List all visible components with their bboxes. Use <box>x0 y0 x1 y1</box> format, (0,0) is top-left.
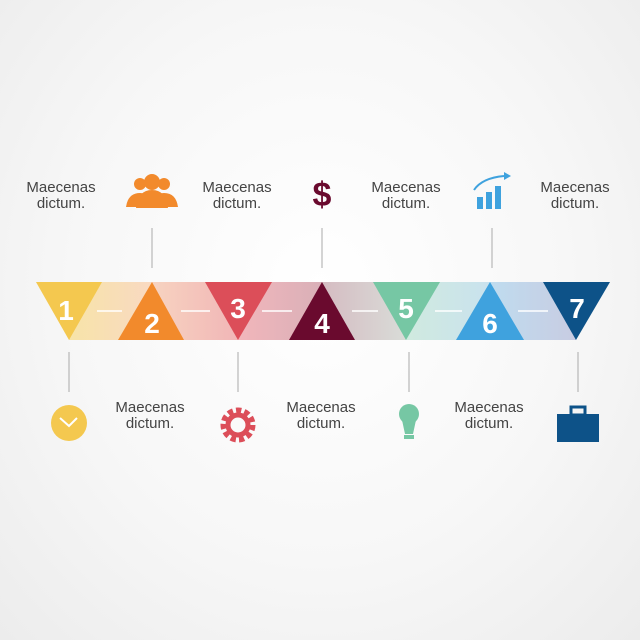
icon: dollar: $ <box>313 176 332 214</box>
text labels <box>26 179 610 432</box>
icon: growth chart <box>474 172 511 209</box>
step 7 triangle <box>543 282 610 340</box>
text labels: Maecenas <box>286 399 356 416</box>
step 1 triangle: 1 <box>58 295 74 326</box>
step 3 triangle: 3 <box>230 293 246 324</box>
text labels: Maecenas <box>540 179 610 196</box>
text labels: Maecenas <box>371 179 441 196</box>
icon: gear <box>224 411 252 439</box>
text labels: dictum. <box>213 195 261 212</box>
step 2 triangle <box>118 282 184 340</box>
step 5 triangle: 5 <box>398 293 414 324</box>
text labels: Maecenas <box>115 399 185 416</box>
text labels: dictum. <box>551 195 599 212</box>
text labels: dictum. <box>126 415 174 432</box>
text labels: dictum. <box>382 195 430 212</box>
text labels: Maecenas <box>454 399 524 416</box>
step 5 triangle <box>373 282 440 340</box>
icon: bulb <box>399 404 419 439</box>
icon: briefcase <box>557 407 599 442</box>
icon: clock <box>51 405 87 441</box>
icon: people <box>126 174 178 208</box>
step 7 triangle: 7 <box>569 293 585 324</box>
step 4 triangle: 4 <box>314 308 330 339</box>
text labels: dictum. <box>297 415 345 432</box>
step 2 triangle: 2 <box>144 308 160 339</box>
step 1 triangle <box>36 282 102 340</box>
connector lines <box>69 228 578 392</box>
step 6 triangle <box>456 282 524 340</box>
text labels: dictum. <box>37 195 85 212</box>
band background <box>69 282 576 340</box>
text labels: Maecenas <box>202 179 272 196</box>
step 3 triangle <box>205 282 272 340</box>
step 6 triangle: 6 <box>482 308 498 339</box>
step 4 triangle <box>289 282 355 340</box>
text labels: dictum. <box>465 415 513 432</box>
text labels: Maecenas <box>26 179 96 196</box>
